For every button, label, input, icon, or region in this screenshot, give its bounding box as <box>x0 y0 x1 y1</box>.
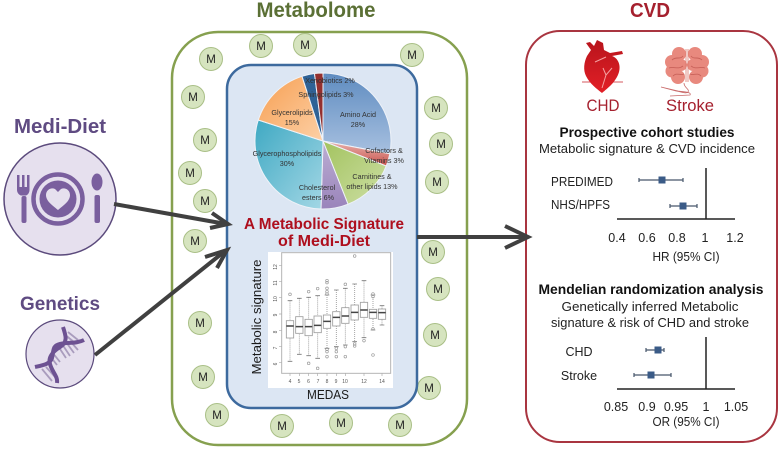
arrow: signature to CVD <box>417 226 528 248</box>
panel: metabolite circles: M <box>256 41 266 53</box>
pie chart: metabolite classes: Amino Acid <box>340 110 376 119</box>
panel: metabolite circles: M <box>431 103 441 115</box>
panel: metabolite circles: M <box>424 383 434 395</box>
box plot: metabolic signature by MEDAS: 14 <box>379 379 385 385</box>
forest plot: OR Mendelian randomization: 0.85 <box>604 400 628 414</box>
box plot: metabolic signature by MEDAS: MEDAS <box>307 387 349 402</box>
forest plot: HR prospective cohorts: 0.4 <box>608 231 626 245</box>
pie chart: metabolite classes: Carnitines & <box>352 172 392 181</box>
forest plot: HR prospective cohorts: NHS/HPFS <box>551 198 610 212</box>
pie chart: metabolite classes: Cofactors & <box>365 146 403 155</box>
panel: metabolite circles: M <box>206 54 216 66</box>
panel: metabolite circles: M <box>336 418 346 430</box>
pie chart: metabolite classes: Glycerolipids <box>271 108 313 117</box>
box plot: metabolic signature by MEDAS: 10 <box>342 379 348 385</box>
pie chart: metabolite classes: Vitamins 3% <box>364 156 405 165</box>
box plot: metabolic signature by MEDAS: 12 <box>273 264 279 270</box>
box plot: metabolic signature by MEDAS: 4 <box>289 379 292 385</box>
box plot: metabolic signature by MEDAS: 7 <box>273 346 279 349</box>
box plot: metabolic signature by MEDAS: 8 <box>326 379 329 385</box>
forest plot: HR prospective cohorts: 0.8 <box>668 231 686 245</box>
heading: A Metabolic Signature of Medi-Diet: A Metabolic Signature <box>244 216 404 233</box>
box plot: metabolic signature by MEDAS: 9 <box>335 379 338 385</box>
panel: metabolite circles <box>178 34 452 438</box>
box plot: metabolic signature by MEDAS: 11 <box>273 280 279 286</box>
box plot: metabolic signature by MEDAS: Metabolic signature <box>249 260 264 374</box>
panel: metabolite circles: M <box>200 196 210 208</box>
panel: metabolite circles: M <box>428 247 438 259</box>
panel: metabolite circles: M <box>407 50 417 62</box>
icon: heart <box>582 40 623 93</box>
pie chart: metabolite classes: other lipids 13% <box>346 182 398 191</box>
panel: metabolite circles: M <box>277 421 287 433</box>
pie chart: metabolite classes: 30% <box>280 159 295 168</box>
pie chart: metabolite classes: esters 6% <box>302 193 335 202</box>
forest plot: HR prospective cohorts: 1 <box>702 231 709 245</box>
box plot: metabolic signature by MEDAS: 8 <box>273 330 279 333</box>
icon: DNA helix <box>26 320 94 388</box>
forest plot: HR prospective cohorts <box>551 168 744 264</box>
panel: CVD box <box>526 31 777 442</box>
panel: metabolite circles: M <box>433 284 443 296</box>
panel: metabolite circles: M <box>188 92 198 104</box>
forest plot: OR Mendelian randomization: CHD <box>565 345 593 359</box>
text block: prospective cohort studies: Metabolic signature & CVD incidence <box>539 142 755 156</box>
panel: metabolite circles: M <box>212 410 222 422</box>
panel: metabolite circles: M <box>300 40 310 52</box>
forest plot: OR Mendelian randomization: 1 <box>703 400 710 414</box>
panel: metabolite circles: M <box>190 236 200 248</box>
heading: Medi-Diet: Medi-Diet <box>14 116 106 138</box>
box plot: metabolic signature by MEDAS: 5 <box>298 379 301 385</box>
forest plot: OR Mendelian randomization: 0.95 <box>664 400 688 414</box>
label: CHD: CHD <box>586 97 620 115</box>
icon: plate with heart and cutlery <box>4 143 116 255</box>
heading: A Metabolic Signature of Medi-Diet <box>244 216 404 250</box>
title: CVD: CVD <box>630 0 670 22</box>
box plot: metabolic signature by MEDAS: 12 <box>361 379 367 385</box>
box plot: metabolic signature by MEDAS: 7 <box>317 379 320 385</box>
panel: metabolic signature box <box>227 65 417 408</box>
text block: prospective cohort studies: Prospective cohort studies <box>560 125 734 140</box>
pie chart: metabolite classes: Xenobiotics 2% <box>305 76 355 85</box>
panel: metabolite circles: M <box>430 330 440 342</box>
arrow: Medi-Diet to signature <box>114 204 228 228</box>
box plot: metabolic signature by MEDAS: 9 <box>273 313 279 316</box>
box plot: metabolic signature by MEDAS: 6 <box>307 379 310 385</box>
pie chart: metabolite classes: Cholesterol <box>299 183 336 192</box>
panel: metabolite circles: M <box>432 177 442 189</box>
arrow: Genetics to signature <box>95 250 227 355</box>
box plot: metabolic signature by MEDAS: 6 <box>273 362 279 365</box>
forest plot: HR prospective cohorts: HR (95% CI) <box>652 250 720 264</box>
pie chart: metabolite classes: Glycerophospholipids <box>253 149 322 158</box>
panel: metabolite circles: M <box>200 135 210 147</box>
icon: brain <box>661 47 709 96</box>
forest plot: HR prospective cohorts: 0.6 <box>638 231 656 245</box>
panel: metabolome outer box <box>172 32 467 445</box>
forest plot: OR Mendelian randomization <box>561 337 748 429</box>
panel: metabolite circles: M <box>395 420 405 432</box>
forest plot: HR prospective cohorts: 1.2 <box>726 231 744 245</box>
panel: metabolite circles: M <box>436 139 446 151</box>
heading: Genetics: Genetics <box>20 294 100 315</box>
forest plot: HR prospective cohorts: PREDIMED <box>551 175 613 189</box>
pie chart: metabolite classes: 15% <box>285 118 300 127</box>
pie chart: metabolite classes: 28% <box>351 120 366 129</box>
forest plot: OR Mendelian randomization: Stroke <box>561 369 597 383</box>
text block: prospective cohort studies <box>539 125 755 156</box>
panel: metabolite circles: M <box>198 372 208 384</box>
label: Stroke: Stroke <box>666 97 714 115</box>
panel: metabolite circles: M <box>185 168 195 180</box>
text block: Mendelian randomization analysis: Genetically inferred Metabolic <box>562 300 738 314</box>
pie chart: metabolite classes: Sphingolipids 3% <box>298 90 354 99</box>
forest plot: OR Mendelian randomization: 0.9 <box>638 400 656 414</box>
text block: Mendelian randomization analysis <box>538 282 764 330</box>
heading: A Metabolic Signature of Medi-Diet: of Medi-Diet <box>278 233 370 250</box>
forest plot: OR Mendelian randomization: 1.05 <box>724 400 748 414</box>
pie chart: metabolite classes <box>253 73 405 209</box>
box plot: metabolic signature by MEDAS <box>249 252 393 402</box>
forest plot: OR Mendelian randomization: OR (95% CI) <box>652 415 720 429</box>
box plot: metabolic signature by MEDAS: 10 <box>273 296 279 302</box>
text block: Mendelian randomization analysis: signature & risk of CHD and stroke <box>551 316 749 330</box>
panel: metabolite circles: M <box>195 318 205 330</box>
text block: Mendelian randomization analysis: Mendelian randomization analysis <box>538 282 764 297</box>
